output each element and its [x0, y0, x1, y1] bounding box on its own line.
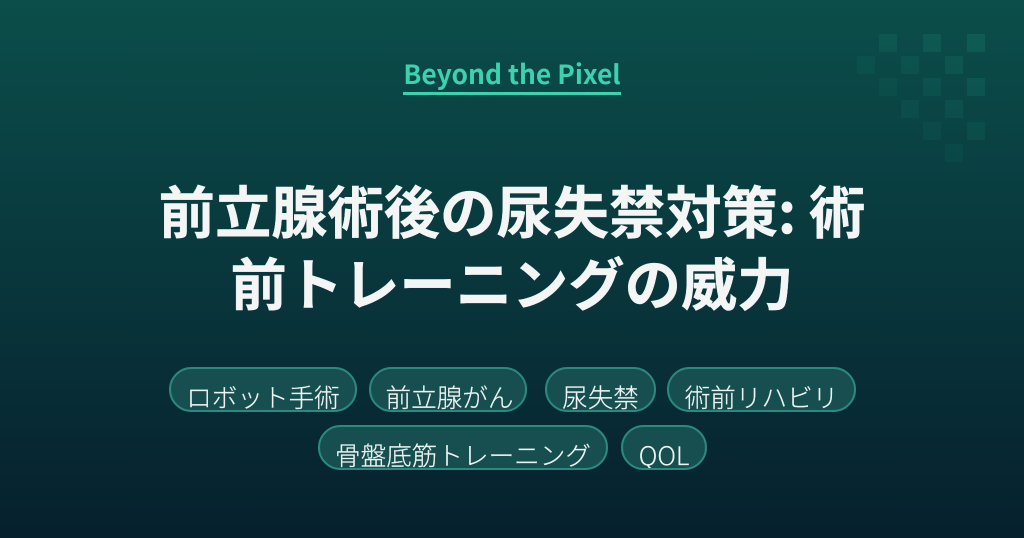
brand label: Beyond the Pixel	[403, 53, 621, 92]
title: 前トレーニングの威力	[231, 241, 793, 322]
tag: prostate cancer	[369, 367, 527, 412]
tag: robot surgery	[169, 367, 357, 412]
tag: QOL	[621, 425, 707, 470]
decorative pixel pattern	[879, 34, 985, 140]
tag: pelvic floor training	[318, 425, 608, 470]
title: 前立腺術後の尿失禁対策: 術	[159, 169, 865, 250]
tag: incontinence	[545, 367, 656, 412]
tags	[169, 367, 856, 470]
tag: prehab	[667, 367, 856, 412]
title	[159, 169, 865, 322]
